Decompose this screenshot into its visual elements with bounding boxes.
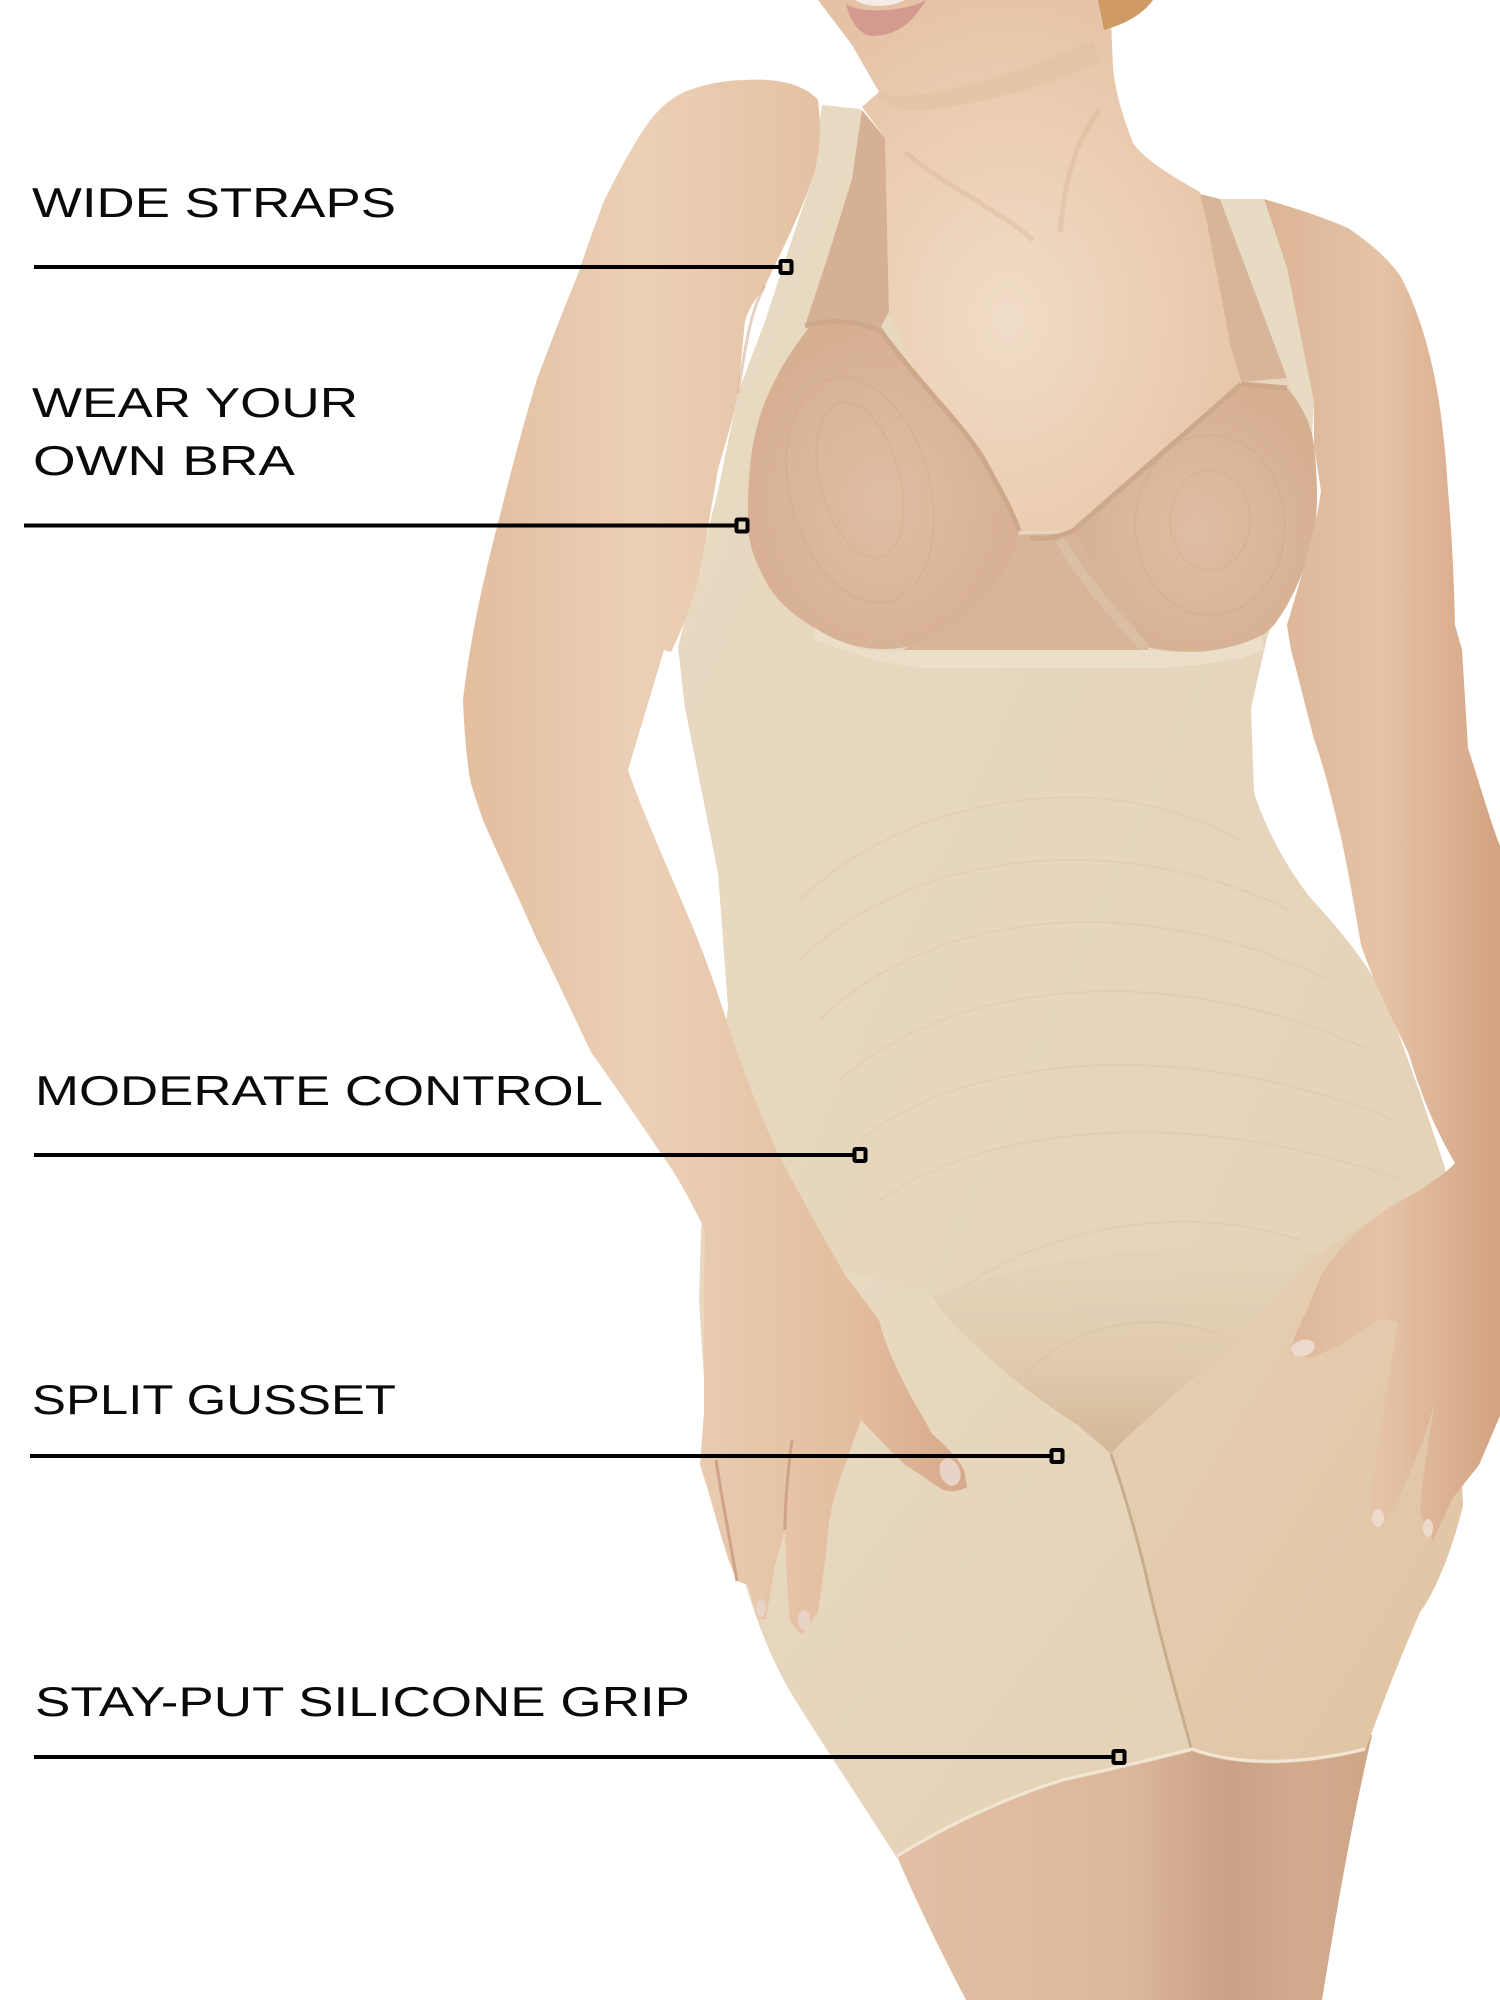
- callout: wide straps: [32, 179, 792, 273]
- hair: [1098, 0, 1153, 30]
- silicone grip hem edge: [897, 1749, 1365, 1856]
- lips: [846, 0, 926, 36]
- inner-thigh shadow: [1111, 1454, 1192, 1751]
- lower legs: [890, 1735, 1372, 2000]
- callout: moderate control: [34, 1067, 866, 1161]
- lace trim lines: [805, 322, 1287, 539]
- left bra cup: [748, 322, 1019, 649]
- right strap band: [1220, 199, 1314, 440]
- right bra cup: [1073, 384, 1317, 652]
- garment: torso and shorts: [678, 105, 1463, 1858]
- callout: split gusset: [30, 1376, 1062, 1462]
- label: stay-put silicone grip: STAY-PUT SILICONE GRIP: [35, 1678, 690, 1725]
- callout: wear your own bra: [24, 379, 748, 532]
- lace band: [1060, 540, 1145, 648]
- label: split gusset: SPLIT GUSSET: [32, 1376, 396, 1423]
- garment: right-leg panel: [1111, 1190, 1463, 1763]
- left strap mesh: [805, 110, 889, 330]
- leader line: wide straps: [34, 261, 792, 273]
- leader line: split gusset: [30, 1450, 1062, 1462]
- knit texture on the tummy: [800, 797, 1400, 1370]
- jaw shadow: [879, 40, 1100, 110]
- left hand finger gaps: [716, 1440, 792, 1581]
- neck, chest and chin: [818, 0, 1241, 531]
- left arm inner crease: [738, 286, 765, 393]
- left hand fingernails: [756, 1455, 964, 1630]
- leader line: wear your own bra: [24, 520, 748, 532]
- teeth: [855, 0, 905, 6]
- leader line: stay-put silicone grip: [34, 1751, 1124, 1763]
- under-bust band: [815, 628, 1264, 668]
- left arm and hand: [463, 80, 967, 1635]
- garment: left-leg panel: [740, 1270, 1192, 1858]
- callout: stay-put silicone grip: [34, 1678, 1124, 1763]
- label: moderate control: MODERATE CONTROL: [35, 1067, 603, 1114]
- right hand fingernails: [1289, 1337, 1433, 1537]
- garment: central tummy panel: [932, 1248, 1321, 1454]
- neck shading: [905, 110, 1100, 240]
- mesh ripple on the cups: [763, 361, 1285, 619]
- leader line: moderate control: [34, 1149, 866, 1161]
- figure: model wearing shapewear: [463, 0, 1500, 2000]
- label: wear your own bra: OWN BRA: [33, 437, 295, 484]
- centre mesh panel: [902, 533, 1150, 652]
- label: wear your own bra: WEAR YOUR: [32, 379, 358, 426]
- label: wide straps: WIDE STRAPS: [32, 179, 396, 226]
- label: wear your own bra: [32, 379, 358, 484]
- right arm and hand: [1264, 199, 1500, 1541]
- right strap mesh: [1200, 194, 1287, 382]
